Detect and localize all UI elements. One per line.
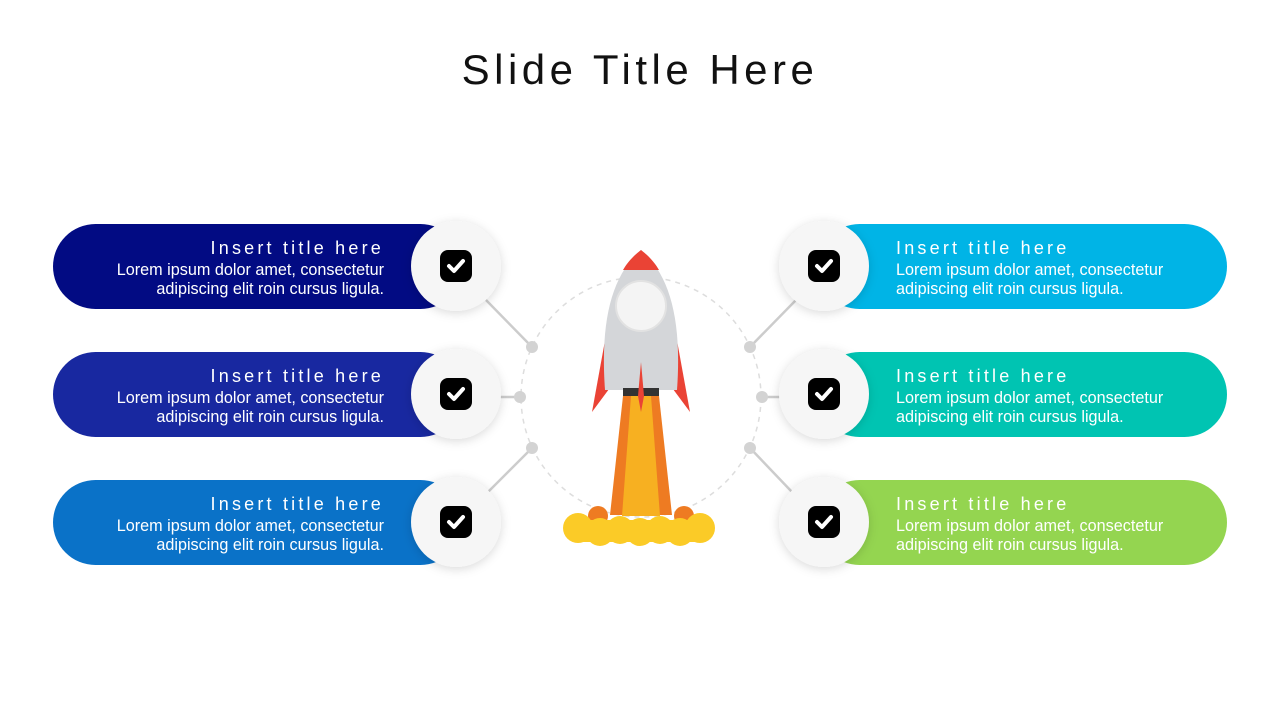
text: left 3: Insert title here	[211, 494, 384, 514]
text: right 1: adipiscing elit roin cursus ligula.	[896, 280, 1124, 298]
text: right 2: adipiscing elit roin cursus ligula.	[896, 408, 1124, 426]
text: left 1: Insert title here	[211, 238, 384, 258]
text: right 2: Lorem ipsum dolor amet, consectetur	[896, 389, 1163, 407]
text: left 2	[117, 366, 384, 426]
title: Slide Title Here	[462, 46, 818, 93]
rocket	[563, 250, 715, 546]
check icons	[440, 250, 840, 538]
text: left 1: adipiscing elit roin cursus ligula.	[156, 280, 384, 298]
text: right 2: Insert title here	[896, 366, 1069, 386]
text: left 3: Lorem ipsum dolor amet, consectetur	[117, 517, 384, 535]
text: right 1	[896, 238, 1163, 298]
text: right 1: Insert title here	[896, 238, 1069, 258]
text: left 2: adipiscing elit roin cursus ligula.	[156, 408, 384, 426]
connectors	[486, 300, 796, 492]
text: right 3: Lorem ipsum dolor amet, consectetur	[896, 517, 1163, 535]
text: left 1: Lorem ipsum dolor amet, consectetur	[117, 261, 384, 279]
text: right 3: adipiscing elit roin cursus ligula.	[896, 536, 1124, 554]
text: left 3: adipiscing elit roin cursus ligula.	[156, 536, 384, 554]
text: right 3	[896, 494, 1163, 554]
text: left 1	[117, 238, 384, 298]
icon circles	[411, 221, 869, 567]
text: left 3	[117, 494, 384, 554]
pills	[53, 224, 1227, 565]
text: left 2: Lorem ipsum dolor amet, consectetur	[117, 389, 384, 407]
text: right 2	[896, 366, 1163, 426]
text: right 3: Insert title here	[896, 494, 1069, 514]
text: right 1: Lorem ipsum dolor amet, consectetur	[896, 261, 1163, 279]
text: left 2: Insert title here	[211, 366, 384, 386]
dashed orbit	[521, 277, 761, 517]
